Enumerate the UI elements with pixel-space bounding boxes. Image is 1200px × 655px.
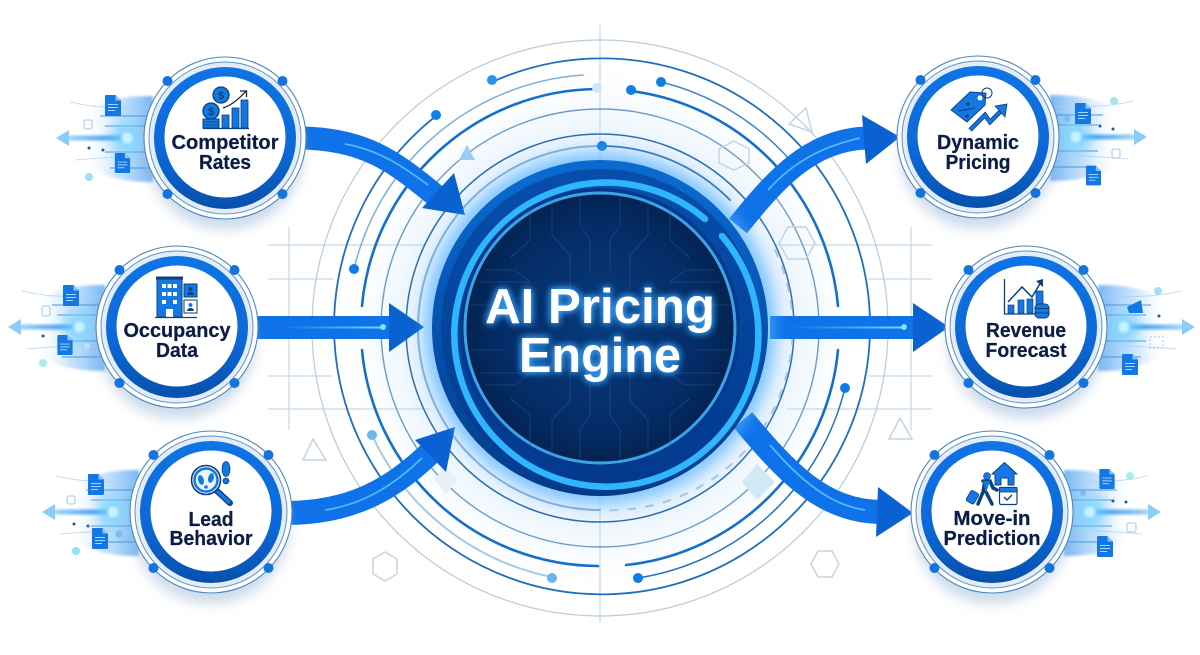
label: Revenue (986, 319, 1066, 342)
icon: price tag and trend arrow (951, 88, 1007, 130)
label: Dynamic (937, 131, 1019, 154)
label: Move-in (954, 507, 1030, 530)
icon: building with residents (155, 276, 197, 318)
label: Lead (188, 508, 234, 531)
node: lead behavior (130, 431, 292, 604)
node: move-in prediction: Prediction (944, 527, 1040, 550)
label: Competitor (172, 131, 279, 154)
icon: coins and rising bars: $ (208, 106, 214, 118)
hub title: AI Pricing (485, 280, 715, 334)
output arrow: move-in prediction (743, 420, 913, 537)
data stream: dynamic pricing (1050, 95, 1147, 185)
icon: revenue chart and coins (1004, 279, 1049, 318)
background grid and crosshair lines (268, 25, 932, 622)
icon: magnifier and footprints (192, 462, 230, 503)
data stream: competitor rates (56, 95, 153, 182)
node: competitor rates (144, 57, 306, 230)
data stream: lead behavior (42, 470, 139, 556)
data stream: move-in prediction (1064, 469, 1161, 557)
circuit traces (470, 196, 730, 460)
node: dynamic pricing: Pricing (946, 151, 1010, 174)
node: revenue forecast (945, 246, 1107, 419)
icon: mover, house and calendar (966, 462, 1017, 505)
node: revenue forecast: Forecast (986, 339, 1067, 362)
node: occupancy data: Data (156, 339, 199, 362)
node: move-in prediction (911, 431, 1073, 604)
icon: coins and rising bars (203, 87, 249, 128)
central AI pricing engine hub: Engine (519, 329, 681, 383)
center halo glow (330, 58, 870, 598)
input arrow: competitor rates (298, 138, 465, 215)
icon: coins and rising bars: $ (218, 90, 224, 102)
node: lead behavior: Behavior (170, 527, 253, 550)
output arrow: revenue forecast (770, 303, 949, 352)
node: dynamic pricing (897, 56, 1059, 229)
output arrow: dynamic pricing (738, 115, 900, 226)
central AI pricing engine hub (424, 152, 776, 504)
label: Occupancy (124, 319, 231, 342)
data stream: revenue forecast (1098, 285, 1195, 375)
input arrow: lead behavior (286, 427, 455, 513)
node: occupancy data (96, 246, 258, 419)
input arrow: occupancy data (250, 303, 424, 352)
concentric technology rings (312, 40, 888, 616)
decorative geometric shapes (303, 108, 912, 581)
ring node dots (349, 75, 850, 583)
node: competitor rates: Rates (199, 151, 251, 174)
data stream: occupancy data (8, 285, 105, 371)
